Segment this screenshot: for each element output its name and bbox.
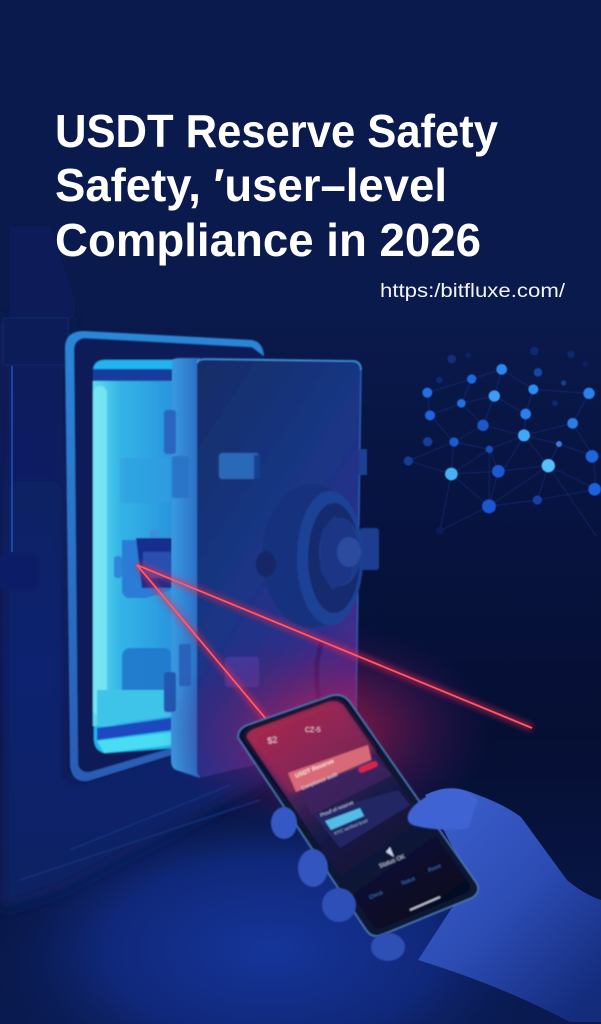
network graph [404, 347, 601, 537]
screen labels and buttons [267, 727, 442, 910]
interior lock block [114, 530, 172, 598]
screen labels and buttons: CZ-5 [305, 727, 321, 734]
phone screen [247, 701, 470, 928]
door bolts [219, 449, 379, 687]
title: USDT Reserve Safety [55, 105, 498, 157]
laser beams [137, 565, 532, 768]
screen labels and buttons: $2 [267, 734, 278, 746]
smartphone [238, 695, 478, 936]
screen glow [247, 701, 375, 795]
card: alert [288, 745, 392, 815]
screen labels and buttons: Status OK [379, 854, 406, 870]
vault wall [0, 226, 270, 910]
hand palm behind phone [418, 788, 601, 1022]
screen labels and buttons: Status [401, 876, 416, 887]
card: balance [314, 790, 410, 848]
hand fingers [271, 788, 478, 961]
vault door [164, 358, 379, 778]
wall latch [0, 553, 38, 591]
title [55, 105, 498, 266]
red ambient glow [160, 625, 490, 835]
combination dial [256, 484, 363, 628]
door face [197, 359, 361, 777]
title: Safety, ′user–level [55, 159, 447, 211]
screen labels and buttons: Check [369, 890, 384, 901]
door hinges [164, 410, 191, 712]
card: balance: KYC verified level [334, 818, 368, 836]
screen labels and buttons: Reset [428, 863, 442, 874]
card: alert: Compliance audit [301, 772, 339, 792]
title: Compliance in 2026 [55, 214, 481, 266]
vault interior [93, 360, 175, 753]
door side edge [171, 358, 200, 778]
card: alert: USDT Reserve [295, 759, 336, 780]
vault frame [65, 331, 270, 781]
card: balance: Proof of reserve [320, 800, 355, 819]
website url: https:/bitfluxe.com/ [380, 280, 566, 302]
